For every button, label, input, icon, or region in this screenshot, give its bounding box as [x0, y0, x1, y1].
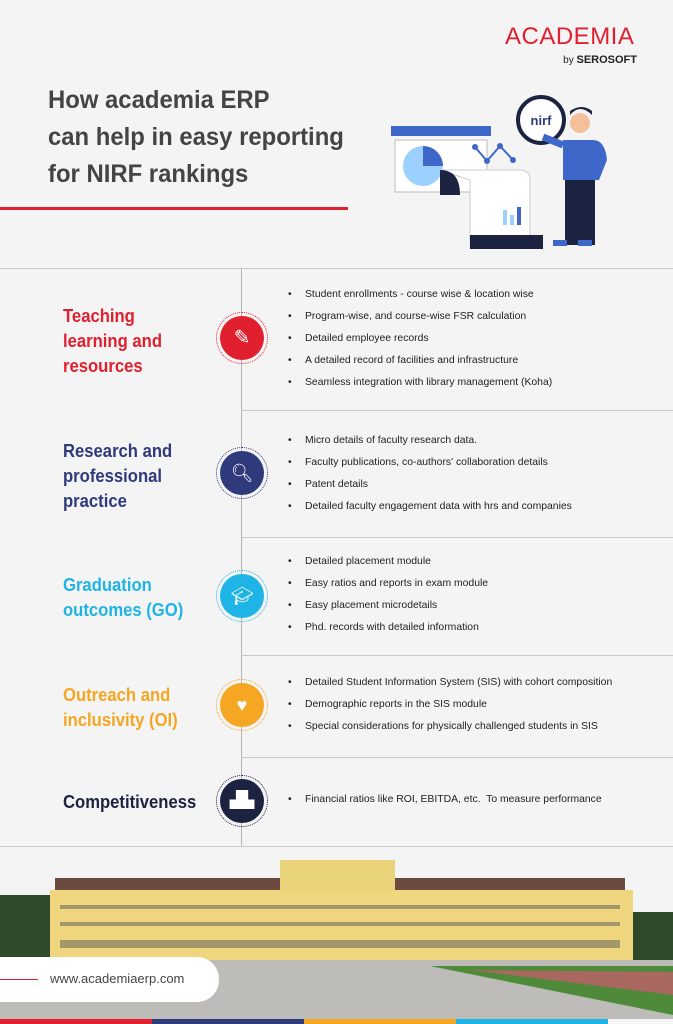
icon: competitiveness — [220, 779, 264, 823]
list: outreach: Detailed Student Information System (SIS) with cohort composition — [305, 677, 612, 688]
heading: teaching: Teaching — [63, 305, 135, 326]
heading: research: professional — [63, 465, 162, 486]
list: research — [288, 435, 572, 512]
heading: graduation: outcomes (GO) — [63, 599, 183, 620]
heading: teaching — [63, 305, 162, 376]
heading: research: practice — [63, 490, 127, 511]
icon: teaching — [220, 316, 264, 360]
icon: graduation — [220, 574, 264, 618]
heading: graduation: Graduation — [63, 574, 152, 595]
icon: graduation: 🎓︎ — [231, 586, 253, 606]
heading: research — [63, 440, 172, 511]
icon: research: 🔍︎ — [231, 463, 253, 483]
title underline — [0, 207, 348, 210]
heading: research: Research and — [63, 440, 172, 461]
heading: outreach: inclusivity (OI) — [63, 709, 178, 730]
title: for NIRF rankings — [48, 160, 248, 188]
list: outreach — [288, 677, 612, 732]
list: teaching: Detailed employee records — [305, 333, 429, 344]
heading: competitiveness: Competitiveness — [63, 791, 196, 812]
list: graduation: Easy placement microdetails — [305, 600, 437, 611]
logo: ACADEMIA — [505, 23, 634, 50]
url pill: www.academiaerp.com — [50, 971, 184, 986]
vertical timeline — [241, 268, 242, 846]
list: research: Patent details — [305, 479, 368, 490]
list: research: Detailed faculty engagement data with hrs and companies — [305, 501, 572, 512]
icon: competitiveness: ▟▙ — [230, 792, 254, 809]
list: outreach: Special considerations for physically challenged students in SIS — [305, 721, 598, 732]
url pill — [0, 957, 219, 1002]
bottom colour bar — [0, 1019, 673, 1024]
heading: outreach — [63, 684, 178, 730]
title: How academia ERP — [48, 86, 270, 114]
logo — [505, 23, 637, 66]
list: graduation: Easy ratios and reports in exam module — [305, 578, 488, 589]
heading: outreach: Outreach and — [63, 684, 170, 705]
list: research: Micro details of faculty research data. — [305, 435, 477, 446]
icon: outreach: ♥ — [237, 695, 247, 715]
title — [48, 86, 344, 188]
icon: outreach — [220, 683, 264, 727]
title: can help in easy reporting — [48, 123, 344, 151]
list: teaching: Program-wise, and course-wise FSR calculation — [305, 311, 526, 322]
list: teaching — [288, 289, 552, 388]
list: teaching: Student enrollments - course wise & location wise — [305, 289, 534, 300]
list: graduation: Detailed placement module — [305, 556, 431, 567]
icon: research — [220, 451, 264, 495]
logo: by SEROSOFT — [563, 54, 637, 66]
list: competitiveness: Financial ratios like ROI, EBITDA, etc. To measure performance — [305, 794, 602, 805]
list: graduation — [288, 556, 488, 633]
list: graduation: Phd. records with detailed information — [305, 622, 479, 633]
full-width top divider — [0, 268, 673, 269]
photo: palace — [0, 860, 673, 1019]
list: research: Faculty publications, co-authors' collaboration details — [305, 457, 548, 468]
illustration — [391, 95, 607, 249]
heading: teaching: learning and — [63, 330, 162, 351]
icon: teaching: ✎ — [234, 327, 250, 349]
list: outreach: Demographic reports in the SIS module — [305, 699, 487, 710]
heading: graduation — [63, 574, 183, 620]
illustration: nirf — [531, 113, 552, 128]
list: teaching: A detailed record of facilities and infrastructure — [305, 355, 518, 366]
list: teaching: Seamless integration with library management (Koha) — [305, 377, 552, 388]
heading: teaching: resources — [63, 355, 143, 376]
